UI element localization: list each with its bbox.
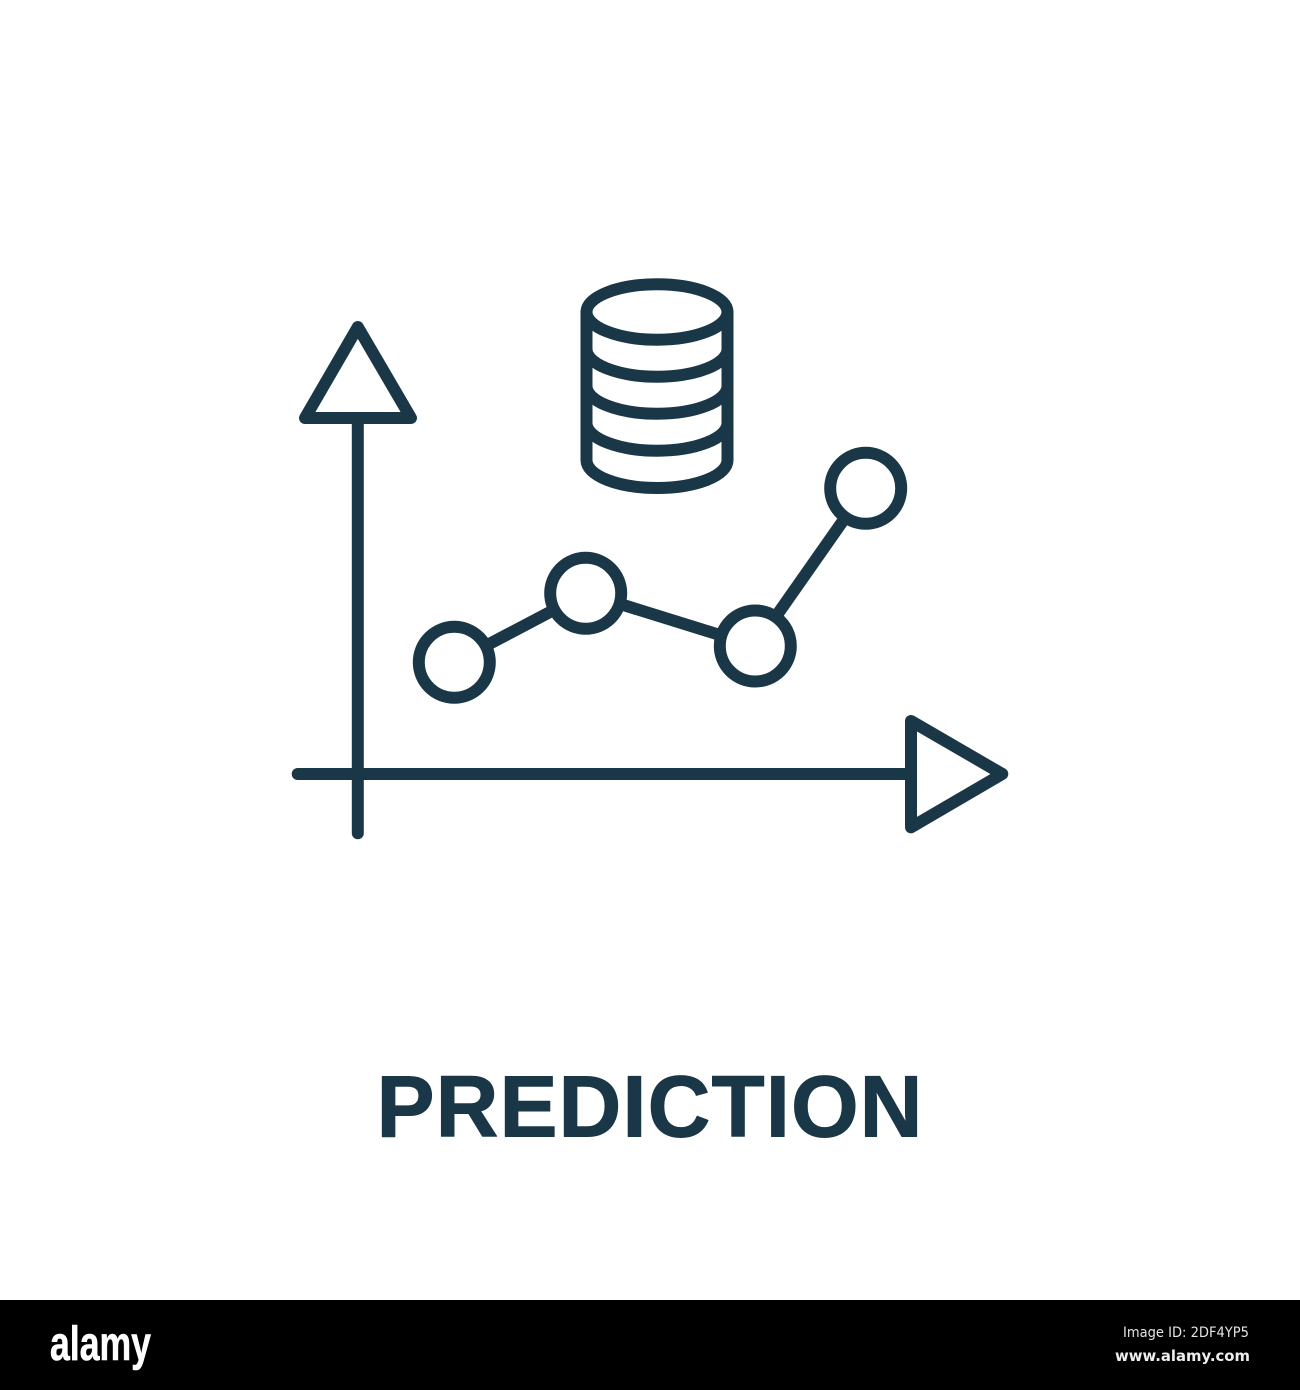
- y axis arrow: [305, 327, 411, 833]
- alamy logo: alamy: [50, 1318, 151, 1371]
- image id: Image ID: 2DF4YP5: [1123, 1325, 1249, 1341]
- footer bar: [0, 1300, 1300, 1390]
- x axis arrow: [298, 721, 1002, 827]
- database icon: [586, 284, 728, 488]
- website: www.alamy.com: [1115, 1347, 1250, 1365]
- icon: prediction chart: [298, 284, 1002, 833]
- line chart: [419, 453, 901, 698]
- title: PREDICTION: [376, 1058, 922, 1156]
